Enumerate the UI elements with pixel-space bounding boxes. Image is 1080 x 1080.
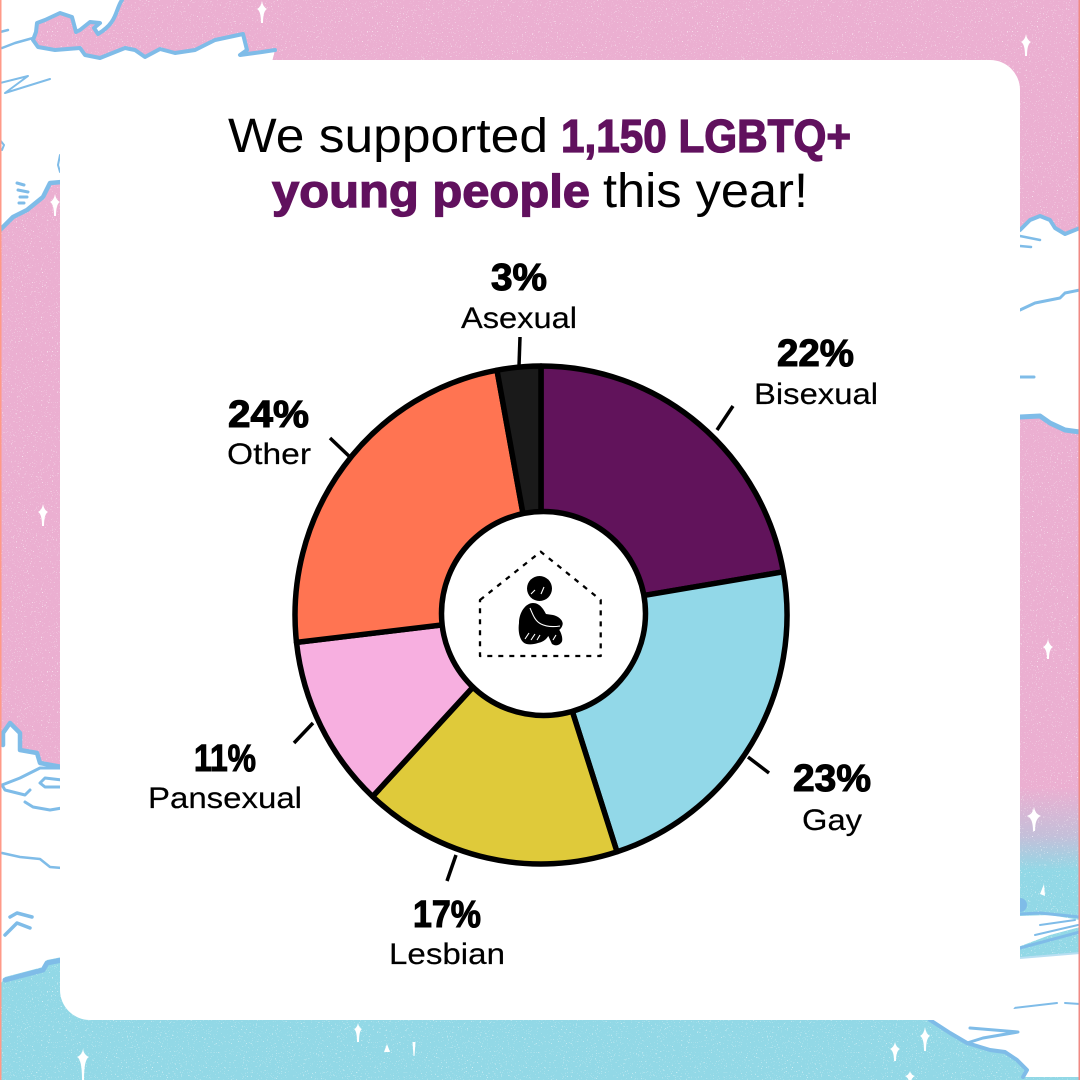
label: bisexual 22%: Bisexual — [754, 378, 878, 411]
label: pansexual 11%: Pansexual — [148, 782, 302, 815]
donut chart — [295, 366, 787, 864]
slice: gay 23% — [541, 572, 787, 852]
label: gay 23% — [793, 758, 871, 837]
label: asexual 3%: Asexual — [461, 302, 577, 335]
label: pansexual 11% — [148, 738, 302, 815]
label: lesbian 17% — [389, 894, 505, 971]
icon: dashed house outline — [480, 552, 601, 656]
icon: person sitting inside dashed house — [480, 552, 601, 656]
panel: white card — [60, 60, 1020, 1020]
label: gay 23%: 23% — [793, 758, 871, 800]
slice: asexual 3% — [497, 366, 541, 613]
leader lines — [294, 337, 769, 881]
label: pansexual 11%: 11% — [194, 738, 256, 780]
label: lesbian 17%: Lesbian — [389, 938, 505, 971]
label: asexual 3%: 3% — [491, 257, 547, 299]
icon: head — [527, 576, 552, 601]
icon: white hatch details — [525, 587, 560, 640]
title: We supported — [228, 110, 548, 163]
label: asexual 3% — [461, 257, 577, 335]
label: bisexual 22% — [754, 333, 878, 411]
pink band: left — [0, 182, 62, 765]
gradient band: right pink to blue — [1018, 415, 1080, 958]
slice: other 24% — [295, 370, 541, 642]
edge lines — [0, 0, 2, 1080]
title: 1,150 LGBTQ+ — [561, 110, 851, 162]
title: this year! — [603, 165, 808, 218]
label: bisexual 22%: 22% — [777, 333, 854, 375]
white cloud: lower right — [1018, 915, 1080, 947]
label: other 24% — [227, 394, 311, 471]
label: gay 23%: Gay — [802, 804, 862, 837]
center hole — [442, 512, 646, 716]
title: young people — [272, 165, 590, 217]
slice: bisexual 22% — [541, 366, 783, 613]
pink band: top and upper right — [33, 0, 1080, 234]
title — [228, 110, 851, 218]
label: other 24%: Other — [227, 438, 311, 471]
label: lesbian 17%: 17% — [413, 894, 481, 936]
slice: pansexual 11% — [296, 613, 541, 796]
icon: body — [519, 603, 563, 645]
label: other 24%: 24% — [228, 394, 309, 436]
slice: lesbian 17% — [373, 613, 617, 864]
blue band: bottom — [0, 957, 1080, 1080]
